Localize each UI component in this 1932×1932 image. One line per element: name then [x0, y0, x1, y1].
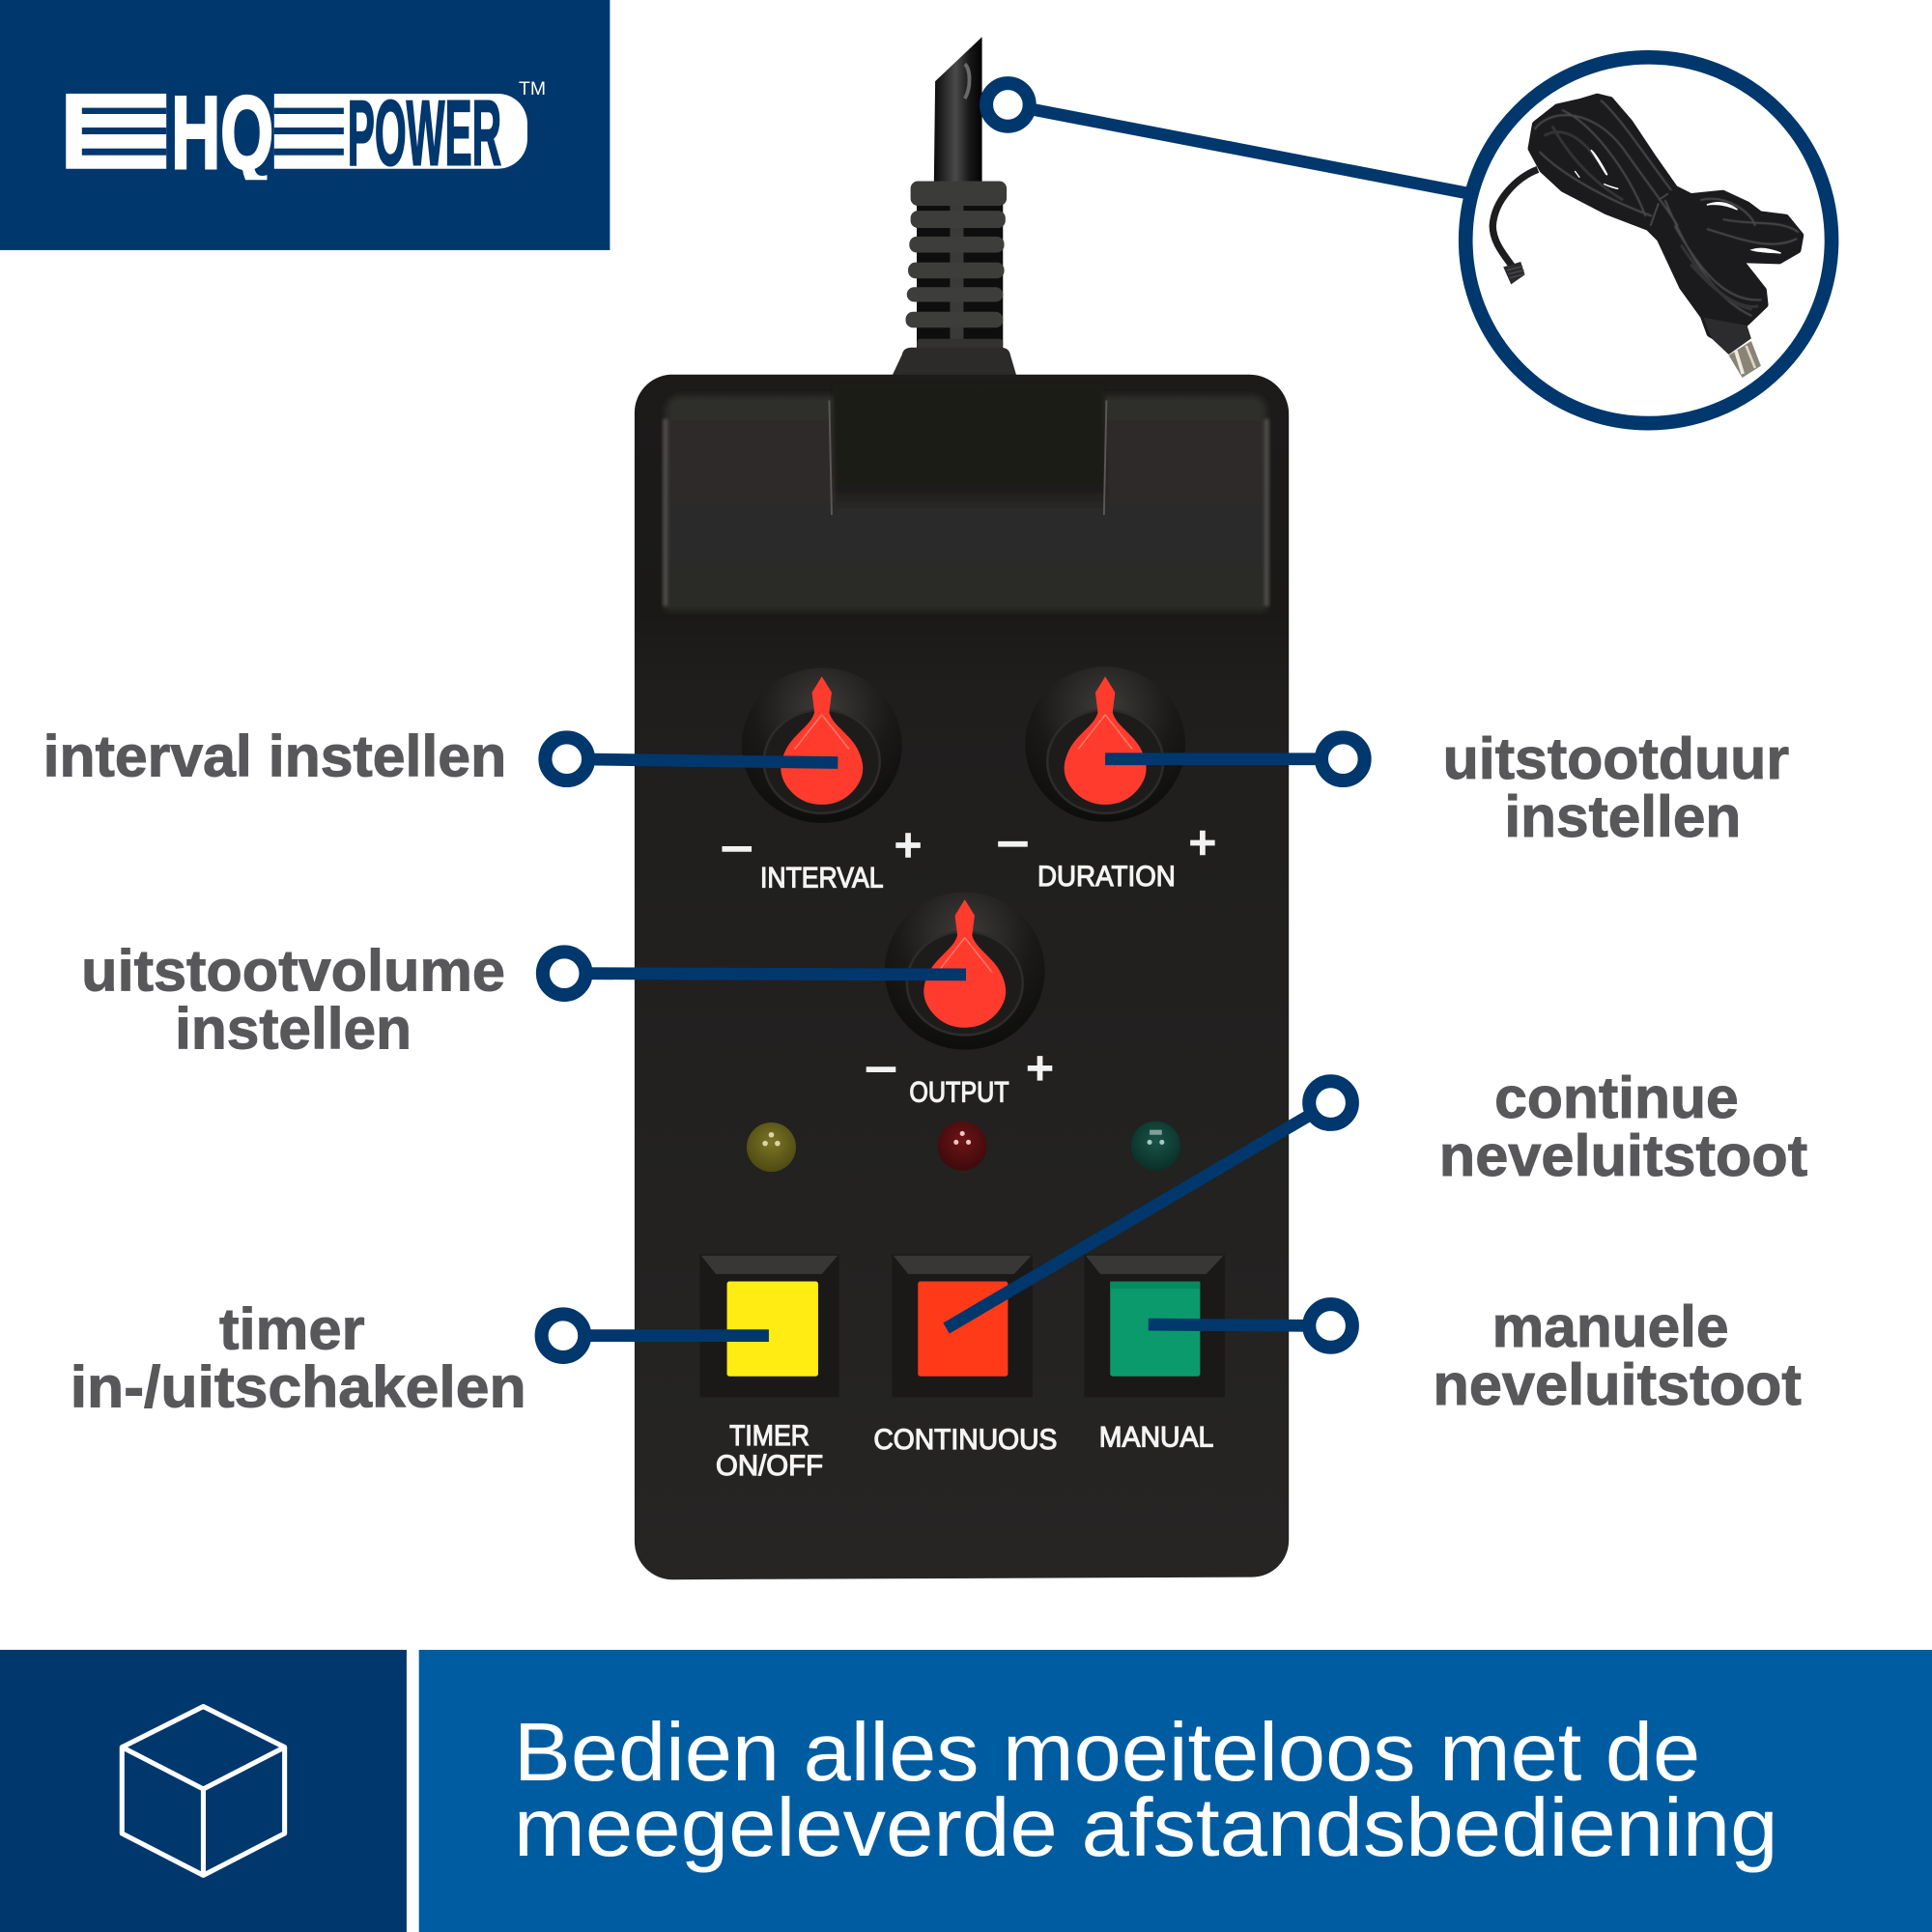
button: continuous	[892, 1254, 1033, 1397]
callout: continuous	[947, 1081, 1352, 1328]
label: manuele neveluitstoot: neveluitstoot	[1433, 1352, 1802, 1417]
remote cable stub	[892, 37, 1016, 376]
interval label and scale	[722, 833, 921, 894]
label: uitstootduur instellen: uitstootduur	[1443, 726, 1789, 791]
callout: output	[543, 952, 966, 995]
footer headline: Bedien alles moeiteloos met de	[514, 1707, 1700, 1799]
label: timer in-/uitschakelen: in-/uitschakelen	[71, 1355, 526, 1420]
label: manuele neveluitstoot	[1433, 1294, 1802, 1417]
callout: duration	[1105, 737, 1365, 781]
button labels: CONTINUOUS	[873, 1424, 1057, 1456]
footer headline: meegeleverde afstandsbediening	[514, 1782, 1778, 1874]
connector recess	[833, 384, 1106, 511]
callout: timer	[542, 1314, 769, 1357]
cable coil photo drawing	[1492, 97, 1801, 378]
HQ Power logo	[66, 81, 545, 180]
knob: duration	[1025, 667, 1185, 822]
HQ Power logo: TM	[519, 79, 546, 99]
top raised panel	[666, 395, 1266, 611]
HQ Power logo: HQ	[171, 74, 273, 190]
label: manuele neveluitstoot: manuele	[1492, 1294, 1729, 1359]
label: timer in-/uitschakelen	[71, 1297, 526, 1420]
interval label and scale: INTERVAL	[760, 862, 884, 894]
label: continue neveluitstoot	[1439, 1065, 1807, 1188]
footer icon panel	[0, 1650, 407, 1932]
label: uitstootduur instellen	[1443, 726, 1789, 849]
footer message panel	[419, 1650, 1932, 1932]
button labels: TIMER	[729, 1420, 810, 1452]
button labels	[716, 1420, 1213, 1482]
label: uitstootvolume instellen: instellen	[175, 996, 412, 1061]
label: uitstootvolume instellen: uitstootvolume	[81, 939, 505, 1004]
duration label and scale: DURATION	[1037, 861, 1176, 893]
knob: interval	[742, 668, 902, 823]
footer headline	[514, 1707, 1778, 1874]
knob: output	[885, 892, 1045, 1050]
remote control body	[635, 375, 1289, 1579]
icon: box	[122, 1707, 285, 1875]
label: uitstootduur instellen: instellen	[1504, 784, 1741, 849]
callout: manual	[1149, 1304, 1352, 1348]
duration label and scale	[998, 831, 1215, 893]
status LEDs	[747, 1122, 1180, 1172]
output label and scale	[867, 1056, 1052, 1108]
label: uitstootvolume instellen	[81, 939, 505, 1061]
label: continue neveluitstoot: continue	[1494, 1065, 1739, 1130]
cable inset circle	[1465, 57, 1832, 423]
button: timer	[699, 1254, 839, 1397]
output label and scale: OUTPUT	[909, 1076, 1009, 1108]
label: interval instellen: interval instellen	[43, 724, 506, 789]
button labels: MANUAL	[1099, 1421, 1213, 1453]
logo panel	[0, 0, 610, 250]
button labels: ON/OFF	[716, 1450, 823, 1482]
label: timer in-/uitschakelen: timer	[219, 1297, 365, 1362]
button: manual	[1084, 1254, 1225, 1397]
label: continue neveluitstoot: neveluitstoot	[1439, 1123, 1807, 1188]
HQ Power logo: POWER	[348, 81, 501, 185]
callout: interval	[545, 737, 838, 781]
callout: cable	[986, 83, 1468, 193]
